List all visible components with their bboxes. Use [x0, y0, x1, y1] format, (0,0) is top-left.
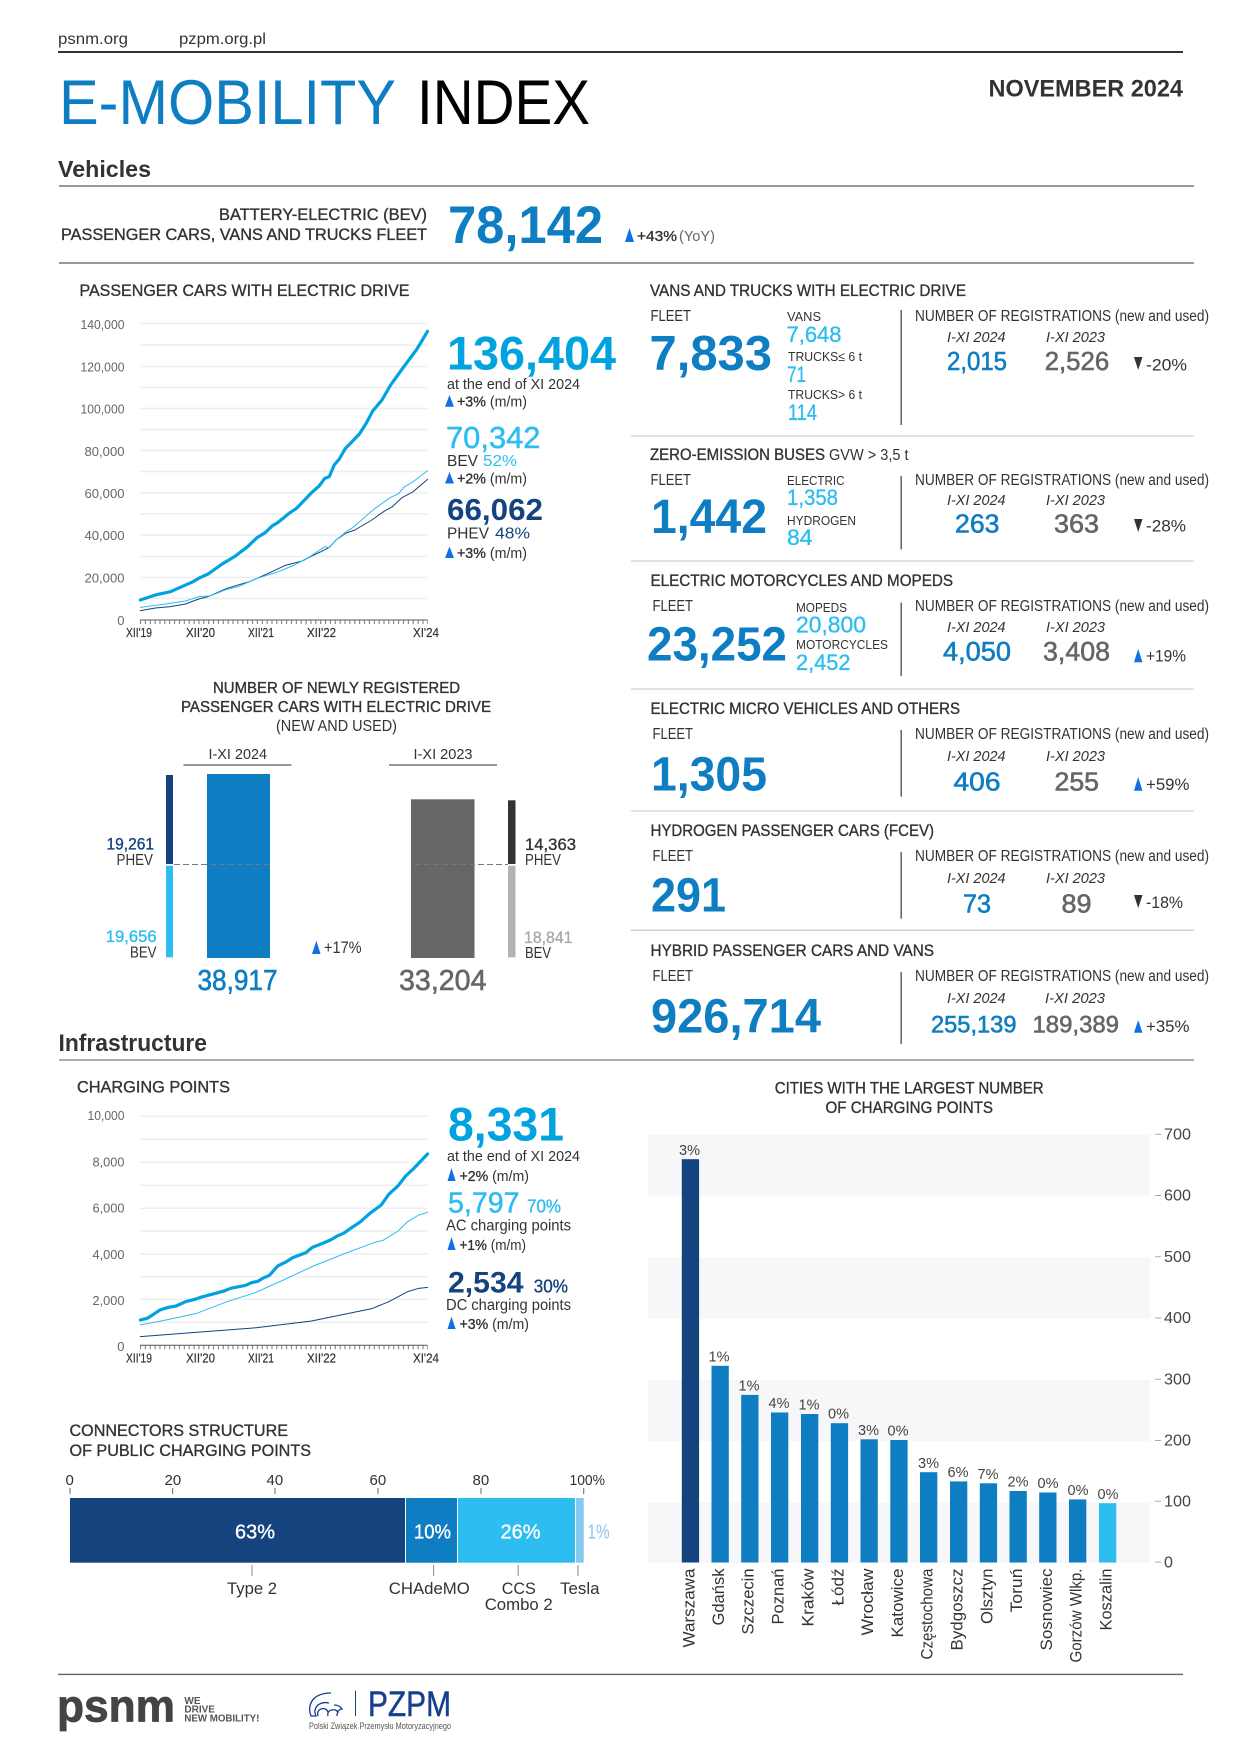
panel: hybrid passenger cars and vans: NUMBER OF REGISTRATIONS (new and used) [915, 968, 1209, 985]
stats: passenger cars: +3% (m/m) [457, 545, 527, 562]
percent axis: 60 [370, 1472, 386, 1489]
panel: hydrogen passenger cars: 73 [963, 889, 991, 919]
percent axis: 80 [472, 1472, 489, 1489]
stats: passenger cars: 66,062 [447, 492, 543, 527]
panel: electric motorcycles and mopeds: 20,800 [796, 612, 866, 638]
panel: zero-emission buses: GVW > 3,5 t [829, 447, 909, 464]
percentage labels: 0% [1038, 1476, 1059, 1492]
panel: cities bar chart: CITIES WITH THE LARGEST NUMBER [775, 1079, 1044, 1098]
logo: psnm [57, 1681, 259, 1732]
stacked bar: 63% [235, 1521, 275, 1543]
logo: psnm: WE [184, 1696, 201, 1707]
y axis labels [88, 1108, 124, 1354]
panel: newly registered passenger cars: 18,841 [524, 928, 572, 947]
panel: electric motorcycles and mopeds: NUMBER OF REGISTRATIONS (new and used) [915, 598, 1209, 615]
y axis labels: 80,000 [84, 444, 124, 459]
x axis labels: XI'24 [413, 1352, 439, 1366]
stats: passenger cars [445, 326, 616, 562]
value axis: 200 [1164, 1432, 1191, 1450]
panel: passenger cars line chart [80, 281, 439, 640]
city labels: Toruń [1008, 1568, 1026, 1612]
city labels: Gdańsk [710, 1568, 728, 1626]
percent axis: 0 [66, 1472, 74, 1489]
y axis labels: 40,000 [84, 528, 124, 543]
value axis: 700 [1164, 1126, 1191, 1144]
panel: vans and trucks: 2,526 [1045, 346, 1109, 376]
panel: vans and trucks: VANS AND TRUCKS WITH ELECTRIC DRIVE [650, 281, 966, 300]
percentage labels: 4% [769, 1396, 790, 1412]
panel: electric motorcycles and mopeds: 4,050 [943, 637, 1011, 667]
y axis labels: 6,000 [92, 1200, 124, 1216]
panel: newly registered passenger cars: (NEW AND USED) [276, 718, 397, 735]
stats: passenger cars: 52% [483, 453, 517, 470]
panel: electric micro vehicles: 1,305 [651, 749, 767, 802]
panel: electric motorcycles and mopeds [647, 571, 1209, 676]
panel: vans and trucks: I-XI 2023 [1046, 329, 1106, 346]
bar 2023 [411, 799, 474, 958]
panel: newly registered passenger cars: BEV [130, 944, 157, 961]
panel: hybrid passenger cars and vans: I-XI 2024 [947, 990, 1006, 1007]
percent axis: 20 [164, 1472, 181, 1489]
panel: vans and trucks: 7,833 [650, 327, 772, 381]
city labels: Kraków [800, 1568, 818, 1626]
city labels [680, 1568, 1116, 1662]
x axis labels [126, 626, 439, 640]
panel: hybrid passenger cars and vans: 926,714 [651, 991, 821, 1044]
percentage labels: 1% [799, 1398, 820, 1414]
connector labels: Combo 2 [485, 1595, 553, 1614]
panel: vans and trucks: 2,015 [947, 346, 1007, 376]
panel: newly registered passenger cars: NUMBER OF NEWLY REGISTERED [213, 680, 460, 697]
stacked bar: 10% [414, 1521, 451, 1543]
y axis labels [80, 317, 124, 628]
panel: zero-emission buses: NUMBER OF REGISTRATIONS (new and used) [915, 472, 1209, 489]
city labels: Szczecin [740, 1568, 758, 1634]
y axis labels: 60,000 [84, 486, 124, 501]
split bar 2023 [508, 800, 516, 957]
panel: hybrid passenger cars and vans: FLEET [652, 968, 693, 985]
value axis: 400 [1164, 1310, 1191, 1327]
panel: vans and trucks: 114 [788, 400, 817, 425]
percentage labels: 3% [679, 1143, 700, 1159]
connector labels [227, 1565, 600, 1614]
percent axis: 100% [570, 1472, 605, 1489]
panel: newly registered passenger cars: 14,363 [525, 835, 576, 854]
stats: passenger cars: +2% (m/m) [457, 470, 527, 487]
panel: electric motorcycles and mopeds: 3,408 [1043, 637, 1110, 667]
panel: hybrid passenger cars and vans: I-XI 2023 [1045, 990, 1106, 1007]
panel: hybrid passenger cars and vans: +35% [1146, 1017, 1190, 1036]
stats: charging points [446, 1098, 580, 1333]
panel: hydrogen passenger cars: NUMBER OF REGISTRATIONS (new and used) [915, 848, 1209, 865]
y axis labels: 8,000 [92, 1154, 124, 1170]
panel: connectors structure: CONNECTORS STRUCTURE [70, 1421, 288, 1440]
panel: zero-emission buses: HYDROGEN [787, 513, 856, 528]
panel: zero-emission buses: 84 [787, 525, 812, 550]
city labels: Sosnowiec [1038, 1568, 1056, 1650]
stats: passenger cars: PHEV [447, 526, 489, 543]
panel: zero-emission buses: 1,358 [787, 485, 838, 510]
stats: charging points: +1% (m/m) [460, 1237, 526, 1254]
panel: hydrogen passenger cars: -18% [1146, 893, 1183, 912]
x axis labels: XII'21 [248, 626, 274, 640]
bars [682, 1159, 1116, 1562]
panel: hydrogen passenger cars: 291 [651, 870, 726, 923]
y axis labels: 120,000 [80, 360, 124, 374]
panel: electric micro vehicles: I-XI 2023 [1046, 748, 1106, 765]
headline BEV fleet [61, 196, 715, 255]
panel: newly registered passenger cars: PHEV [116, 852, 154, 869]
panel: vans and trucks: 7,648 [786, 322, 842, 347]
city labels: Warszawa [680, 1568, 698, 1648]
panel: passenger cars line chart: PASSENGER CARS WITH ELECTRIC DRIVE [80, 281, 410, 300]
panel: vans and trucks: -20% [1146, 356, 1187, 375]
icon: car swoosh [310, 1693, 342, 1716]
panel: newly registered passenger cars: 38,917 [198, 965, 278, 997]
panel: newly registered passenger cars: PHEV [525, 852, 562, 869]
city labels: Wrocław [859, 1568, 877, 1636]
stats: passenger cars: 70,342 [446, 420, 540, 455]
headline BEV fleet: +43% [637, 228, 677, 245]
panel: connectors structure: OF PUBLIC CHARGING POINTS [70, 1441, 311, 1460]
panel: vans and trucks: TRUCKS> 6 t [788, 387, 862, 402]
y axis labels: 100,000 [80, 402, 124, 416]
x axis labels: XII'19 [126, 626, 152, 640]
panel: electric micro vehicles: ELECTRIC MICRO VEHICLES AND OTHERS [650, 699, 960, 718]
value axis: 0 [1164, 1554, 1173, 1572]
stacked bar: 1% [588, 1521, 610, 1543]
stats: charging points: AC charging points [446, 1218, 571, 1235]
stats: charging points: 70% [527, 1197, 561, 1217]
x axis labels: XII'22 [307, 1352, 336, 1366]
city labels: Gorzów Wlkp. [1068, 1568, 1086, 1662]
y axis labels: 0 [117, 613, 124, 628]
percentage labels: 1% [739, 1378, 760, 1394]
panel: electric motorcycles and mopeds: ELECTRIC MOTORCYCLES AND MOPEDS [650, 571, 953, 590]
stats: passenger cars: 136,404 [447, 326, 616, 380]
value axis: 300 [1164, 1372, 1191, 1388]
heading: infrastructure: Infrastructure [58, 1030, 207, 1057]
stats: charging points: DC charging points [446, 1297, 571, 1314]
panel: electric motorcycles and mopeds: I-XI 2023 [1046, 619, 1106, 636]
heading: vehicles: Vehicles [58, 156, 151, 182]
x axis labels: XII'20 [186, 626, 215, 640]
y axis labels: 2,000 [92, 1293, 124, 1308]
panel: newly registered passenger cars: I-XI 2024 [208, 746, 267, 763]
city labels: Łódź [830, 1568, 848, 1606]
panel: newly registered passenger cars: I-XI 2023 [414, 746, 472, 763]
panel: vans and trucks: I-XI 2024 [947, 329, 1006, 346]
percentage labels: 0% [888, 1424, 909, 1440]
y axis labels: 140,000 [80, 317, 124, 332]
panel: hydrogen passenger cars: HYDROGEN PASSENGER CARS (FCEV) [650, 821, 934, 840]
bands [648, 1134, 1150, 1563]
logo: psnm: NEW MOBILITY! [184, 1714, 259, 1725]
panel: vans and trucks: VANS [787, 309, 821, 324]
panel: vans and trucks: FLEET [650, 308, 691, 325]
panel: zero-emission buses: FLEET [650, 472, 691, 489]
panel: electric micro vehicles: I-XI 2024 [947, 748, 1006, 765]
city labels: Katowice [889, 1568, 907, 1638]
stats: passenger cars: +3% (m/m) [457, 394, 527, 411]
x axis labels: XII'20 [186, 1352, 215, 1366]
stats: charging points: at the end of XI 2024 [447, 1148, 580, 1165]
city labels: Bydgoszcz [948, 1568, 966, 1650]
panel: zero-emission buses: ELECTRIC [787, 473, 844, 488]
value axis: 100 [1164, 1494, 1191, 1510]
panel: hydrogen passenger cars [650, 821, 1209, 923]
percentage labels: 0% [1068, 1483, 1089, 1499]
panel: charging points line chart: CHARGING POINTS [77, 1078, 230, 1097]
panel: vans and trucks: 71 [787, 362, 806, 387]
percentage labels: 3% [918, 1456, 939, 1472]
y axis labels: 0 [117, 1339, 124, 1354]
panel: hydrogen passenger cars: 89 [1062, 889, 1092, 919]
bar 2024 [207, 774, 270, 958]
panel: hydrogen passenger cars: I-XI 2024 [947, 870, 1006, 887]
percentage labels: 2% [1008, 1474, 1029, 1490]
logo: PZPM: Polski Związek Przemysłu Motoryzacyjnego [309, 1721, 451, 1732]
panel: electric micro vehicles: NUMBER OF REGISTRATIONS (new and used) [915, 726, 1209, 743]
y axis labels: 10,000 [88, 1108, 124, 1123]
value axis: 500 [1164, 1249, 1191, 1266]
panel: newly registered passenger cars: 19,261 [106, 834, 154, 853]
panel: vans and trucks [650, 281, 1209, 425]
connector labels: CHAdeMO [389, 1579, 470, 1598]
logo: PZPM: PZPM [368, 1685, 451, 1724]
percentage labels [679, 1143, 1119, 1503]
panel: cities bar chart [648, 1079, 1191, 1662]
percentage labels: 0% [1098, 1487, 1119, 1503]
stats: charging points: 2,534 [448, 1267, 524, 1300]
percentage labels: 0% [828, 1407, 849, 1423]
header links: pzpm.org.pl [179, 31, 266, 48]
panel: newly registered passenger cars: 33,204 [399, 965, 486, 997]
panel: zero-emission buses: -28% [1146, 517, 1186, 536]
panel: newly registered passenger cars [106, 680, 576, 997]
stats: passenger cars: BEV [447, 453, 478, 470]
logo: psnm: DRIVE [184, 1705, 215, 1716]
headline BEV fleet: BATTERY-ELECTRIC (BEV) [219, 206, 427, 224]
panel: electric micro vehicles [650, 699, 1209, 802]
y axis labels: 4,000 [92, 1247, 124, 1262]
percentage labels: 3% [858, 1423, 879, 1439]
panel: hydrogen passenger cars: FLEET [652, 848, 693, 865]
title: E-MOBILITY [59, 68, 396, 138]
panel: electric motorcycles and mopeds: 2,452 [796, 650, 850, 675]
panel: zero-emission buses: ZERO-EMISSION BUSES [650, 445, 825, 464]
city labels: Olsztyn [978, 1568, 996, 1624]
title [59, 68, 590, 138]
percent axis [66, 1472, 605, 1494]
connector labels: Type 2 [227, 1579, 277, 1598]
headline BEV fleet: 78,142 [448, 196, 603, 255]
panel: zero-emission buses: 363 [1054, 509, 1099, 539]
header links: psnm.org [58, 31, 128, 48]
headline BEV fleet: PASSENGER CARS, VANS AND TRUCKS FLEET [61, 226, 427, 244]
panel: newly registered passenger cars: 19,656 [106, 927, 157, 946]
value axis [1155, 1126, 1191, 1572]
x axis labels: XII'19 [126, 1352, 152, 1366]
date: NOVEMBER 2024 [988, 76, 1184, 102]
stats: passenger cars: at the end of XI 2024 [447, 376, 580, 393]
panel: electric micro vehicles: 406 [954, 767, 1000, 797]
x axis labels: XII'22 [307, 626, 336, 640]
panel: electric motorcycles and mopeds: MOPEDS [796, 600, 847, 615]
stats: charging points: 8,331 [448, 1098, 564, 1151]
percent axis: 40 [266, 1472, 283, 1489]
panel: hybrid passenger cars and vans: 189,389 [1032, 1012, 1119, 1039]
panel: hybrid passenger cars and vans: HYBRID PASSENGER CARS AND VANS [650, 941, 934, 960]
percentage labels: 1% [709, 1350, 730, 1366]
series: DC, AC, total [140, 1154, 428, 1337]
stats: charging points: +3% (m/m) [460, 1316, 529, 1333]
city labels: Częstochowa [918, 1568, 936, 1660]
panel: electric motorcycles and mopeds: FLEET [652, 598, 693, 615]
panel: vans and trucks: TRUCKS≤ 6 t [788, 349, 862, 364]
panel: electric motorcycles and mopeds: +19% [1146, 647, 1186, 666]
connector labels: Tesla [560, 1579, 600, 1598]
split bar 2024 [166, 775, 173, 957]
panel: zero-emission buses: I-XI 2024 [947, 492, 1006, 509]
panel: zero-emission buses: I-XI 2023 [1046, 492, 1106, 509]
panel: newly registered passenger cars: PASSENGER CARS WITH ELECTRIC DRIVE [181, 699, 491, 716]
panel: connectors structure [66, 1421, 610, 1614]
panel: electric micro vehicles: FLEET [652, 726, 693, 743]
panel: hybrid passenger cars and vans [650, 941, 1209, 1044]
y axis labels: 20,000 [84, 570, 124, 586]
city labels: Poznań [770, 1568, 788, 1624]
panel: hydrogen passenger cars: I-XI 2023 [1046, 870, 1106, 887]
logo: PZPM [309, 1685, 451, 1732]
panel: newly registered passenger cars: +17% [324, 938, 362, 957]
connector labels: CCS [502, 1579, 536, 1598]
panel: zero-emission buses [650, 445, 1209, 550]
series: PHEV, BEV, total [140, 331, 428, 611]
stats: charging points: +2% (m/m) [460, 1168, 529, 1185]
x axis labels: XI'24 [413, 626, 439, 640]
panel: hybrid passenger cars and vans: 255,139 [931, 1012, 1016, 1039]
x axis labels [126, 1352, 439, 1366]
panel: zero-emission buses: 1,442 [651, 491, 767, 544]
panel: electric motorcycles and mopeds: 23,252 [647, 619, 787, 672]
panel: cities bar chart: OF CHARGING POINTS [826, 1098, 993, 1117]
stacked bar [70, 1498, 610, 1563]
value axis: 600 [1164, 1188, 1191, 1204]
header links [58, 31, 266, 48]
panel: newly registered passenger cars: BEV [525, 945, 552, 962]
stats: passenger cars: 48% [495, 526, 530, 543]
percentage labels: 6% [948, 1465, 969, 1481]
percentage labels: 7% [978, 1467, 999, 1483]
panel: vans and trucks: NUMBER OF REGISTRATIONS (new and used) [915, 308, 1209, 325]
panel: charging points line chart [77, 1078, 439, 1366]
title: INDEX [417, 68, 590, 138]
stats: charging points: 30% [534, 1277, 568, 1297]
x axis labels: XII'21 [248, 1352, 274, 1366]
logo: psnm: psnm [57, 1681, 175, 1732]
panel: electric motorcycles and mopeds: MOTORCYCLES [796, 637, 888, 652]
panel: electric motorcycles and mopeds: I-XI 2024 [947, 619, 1006, 636]
city labels: Koszalin [1098, 1568, 1116, 1630]
panel: electric micro vehicles: 255 [1054, 767, 1099, 797]
stats: charging points: 5,797 [448, 1188, 520, 1220]
stacked bar: 26% [500, 1521, 541, 1543]
headline BEV fleet: (YoY) [679, 228, 715, 245]
panel: zero-emission buses: 263 [955, 509, 1000, 539]
panel: electric micro vehicles: +59% [1146, 775, 1190, 794]
